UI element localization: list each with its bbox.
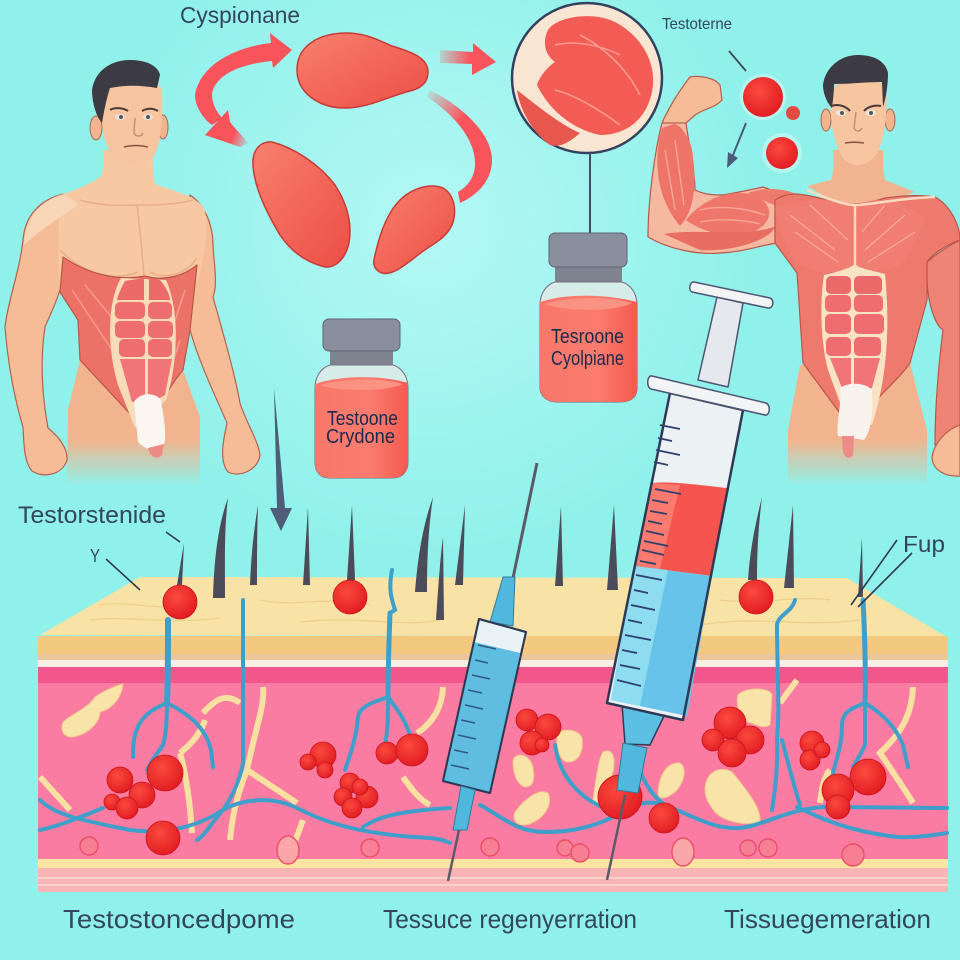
vial: upper bbox=[540, 233, 637, 402]
arrow: to magnifier bbox=[440, 43, 496, 75]
left arm bbox=[5, 194, 67, 475]
leader lines bbox=[106, 532, 912, 607]
white tissue bbox=[134, 394, 165, 449]
label: Cypsionane: Cyspionane bbox=[180, 2, 300, 28]
label: Testorstenide: Testorstenide bbox=[18, 502, 166, 529]
syringe: small bbox=[443, 463, 537, 881]
rectus bbox=[821, 264, 887, 425]
face bbox=[832, 105, 881, 111]
barrel bbox=[607, 393, 743, 720]
figure: right man bbox=[648, 55, 960, 486]
label: Y: Y bbox=[90, 546, 100, 566]
vial: lower bbox=[315, 319, 408, 478]
flexed arm bbox=[648, 77, 795, 253]
forearm muscle bbox=[657, 124, 694, 226]
arrow: curved right bbox=[427, 90, 492, 203]
vial: lower: Crydone bbox=[326, 426, 395, 448]
pec lines bbox=[60, 200, 197, 276]
red clusters bbox=[104, 707, 886, 855]
molecules: top right bbox=[727, 51, 802, 173]
head bbox=[90, 116, 102, 140]
abdominal muscles bbox=[60, 257, 197, 425]
label: Testoterne: Testoterne bbox=[662, 16, 732, 33]
connector line bbox=[589, 153, 591, 235]
skin cross-section bbox=[38, 570, 948, 892]
white tissue bbox=[838, 384, 872, 440]
blood vessels bbox=[40, 570, 947, 843]
organ: top centre gland bbox=[297, 33, 428, 108]
graduations bbox=[617, 425, 681, 686]
hairs bbox=[177, 497, 863, 620]
arrow: top left head bbox=[205, 110, 248, 147]
vial label: Tesroone bbox=[551, 326, 624, 348]
arrow: long down bbox=[270, 388, 292, 531]
molecules: on skin bbox=[163, 580, 773, 619]
fat cells bbox=[62, 684, 772, 825]
arrow: curved top left bbox=[195, 33, 292, 125]
torso muscle bbox=[775, 194, 960, 425]
nozzle bbox=[622, 704, 665, 745]
caption: right: Tissuegemeration bbox=[724, 904, 931, 934]
neck bbox=[807, 150, 915, 205]
syringe: large bbox=[607, 282, 773, 880]
small cells bbox=[80, 836, 864, 866]
caption: centre: Tessuce regenyerration bbox=[383, 904, 637, 934]
magnifier: muscle close-up bbox=[512, 3, 662, 235]
vial label: Testoone bbox=[327, 408, 398, 430]
organ: left gland bbox=[253, 142, 350, 267]
legs bbox=[67, 360, 200, 486]
head bbox=[821, 109, 831, 131]
figure: left man bbox=[5, 60, 260, 486]
organ: right gland bbox=[374, 186, 455, 274]
face bbox=[110, 108, 158, 111]
top surface bbox=[40, 577, 947, 637]
caption: left: Testostoncedpome bbox=[63, 904, 295, 934]
biceps bbox=[686, 193, 769, 235]
rectus bbox=[110, 278, 176, 428]
right arm bbox=[186, 195, 260, 474]
legs bbox=[788, 363, 927, 486]
connective strands bbox=[40, 680, 913, 847]
label: Fup: Fup bbox=[903, 531, 945, 557]
vial: upper: Cyolpiane bbox=[551, 348, 624, 370]
plunger bbox=[698, 297, 743, 387]
neck and chest bbox=[58, 150, 207, 290]
fist bbox=[662, 76, 722, 123]
pectorals bbox=[775, 199, 853, 273]
dermal bands bbox=[38, 636, 948, 654]
fat layer and base bbox=[38, 859, 948, 869]
right arm viewer side bbox=[927, 240, 960, 445]
